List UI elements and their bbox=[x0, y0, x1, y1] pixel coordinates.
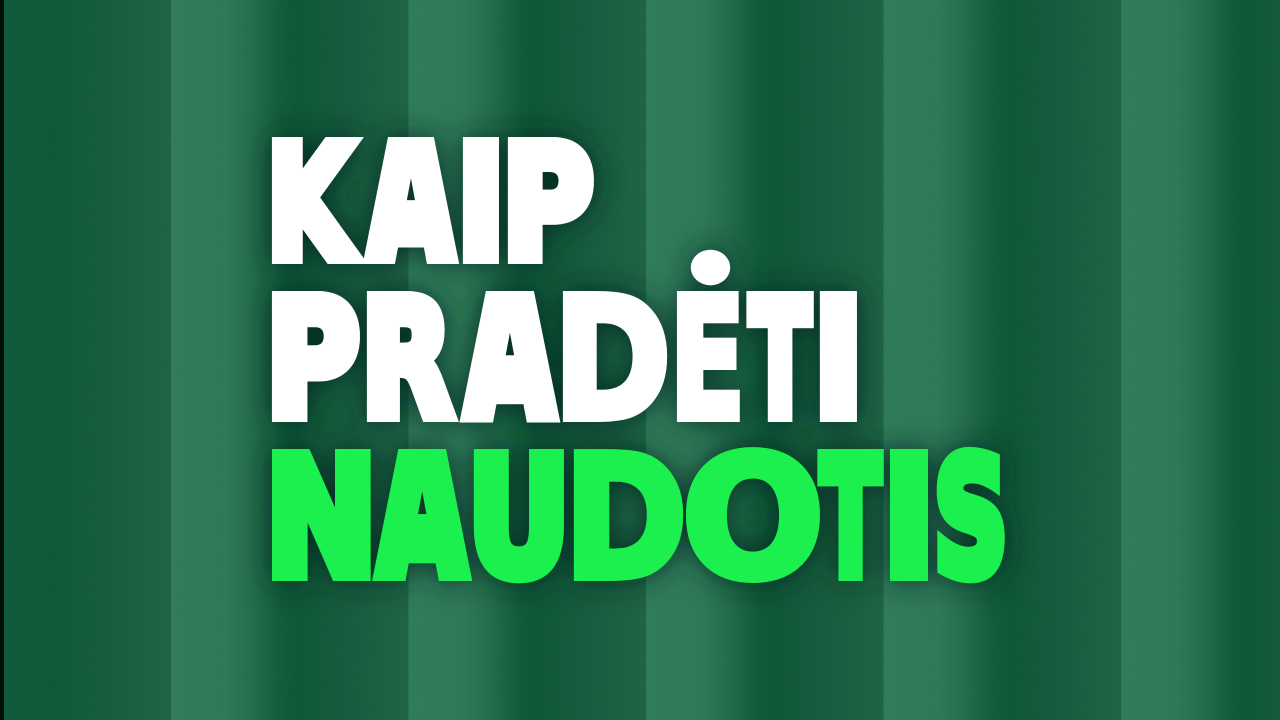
title artwork bbox=[254, 118, 1020, 600]
title line: PRADĖTI: T bbox=[750, 267, 810, 453]
dot above E bbox=[691, 250, 730, 285]
title line: KAIP: A bbox=[367, 70, 455, 316]
title line: NAUDOTIS: S bbox=[934, 424, 1008, 612]
title line: KAIP: I bbox=[457, 113, 505, 294]
title: KAIP PRADĖTI NAUDOTIS bbox=[254, 118, 1020, 600]
background: stripe left of first band bbox=[4, 0, 171, 720]
title line: PRADĖTI: P bbox=[266, 268, 359, 454]
title line: PRADĖTI: D bbox=[554, 262, 671, 458]
title line: KAIP: P bbox=[502, 114, 593, 294]
title line: PRADĖTI: I bbox=[814, 266, 863, 453]
title line: NAUDOTIS: T bbox=[821, 424, 880, 612]
title line: NAUDOTIS: O bbox=[682, 420, 824, 617]
title line: NAUDOTIS: A bbox=[377, 382, 467, 635]
title line: PRADĖTI: A bbox=[464, 223, 555, 475]
title line: NAUDOTIS: I bbox=[884, 425, 934, 613]
title line: NAUDOTIS: U bbox=[468, 425, 570, 613]
title line: KAIP: K bbox=[267, 113, 356, 294]
title line: KAIP bbox=[254, 118, 610, 282]
title line: PRADĖTI: Ė bbox=[670, 261, 745, 458]
title line: NAUDOTIS bbox=[266, 382, 1008, 635]
title line: PRADĖTI bbox=[254, 274, 874, 440]
title line: NAUDOTIS: N bbox=[266, 424, 377, 612]
left black edge bbox=[0, 0, 4, 720]
title line: PRADĖTI: R bbox=[361, 267, 453, 453]
title line: NAUDOTIS: D bbox=[564, 419, 687, 617]
